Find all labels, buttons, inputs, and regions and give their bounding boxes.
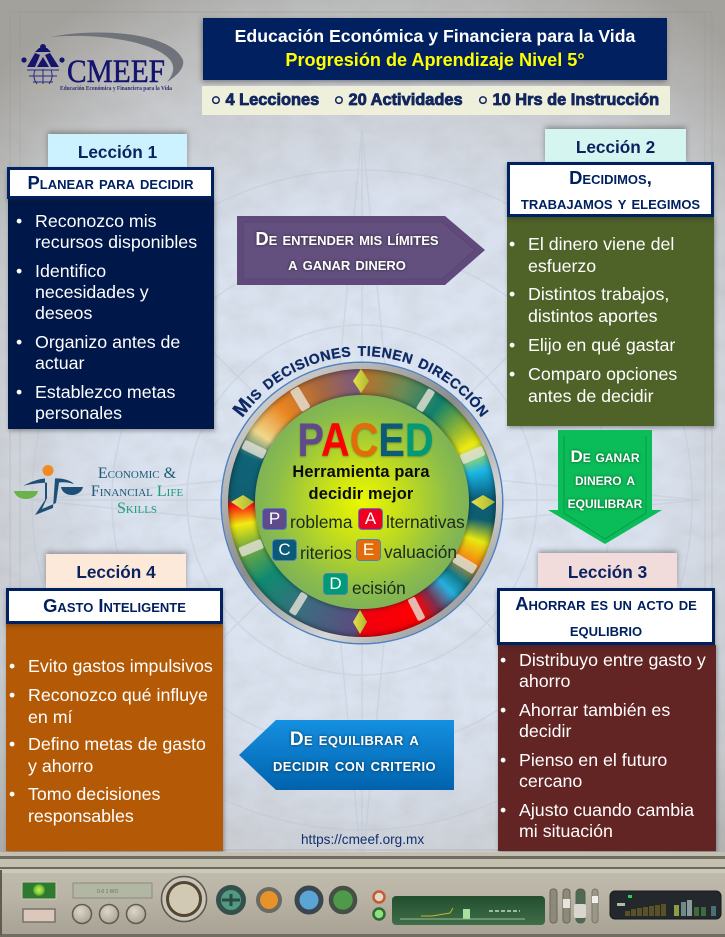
text display and small buttons [72, 883, 152, 924]
lesson 4 bullets: Evito gastos impulsivos [28, 656, 213, 676]
panel: lesson 2 [504, 124, 718, 430]
title banner: Educación Económica y Financiera para la Vida [235, 26, 635, 46]
lesson 2 bullets: Comparo opciones [528, 364, 677, 384]
step badge: Decisión [323, 573, 406, 598]
lesson 2 bullets: antes de decidir [528, 386, 654, 406]
lesson 1 bullets: actuar [35, 353, 84, 373]
step badge: Criterios [272, 539, 352, 563]
wheel colour ring [228, 369, 496, 637]
lesson 1 tab [48, 134, 187, 168]
wheel centre disc [255, 395, 469, 609]
green chart display [392, 896, 545, 925]
lesson 4 bullets [6, 623, 223, 851]
lesson 3 heading: equlibrio [570, 619, 642, 640]
arrow: lesson 2 to lesson 3: De ganar [570, 447, 640, 466]
sliders [550, 889, 598, 923]
lesson 4 bullets: responsables [28, 806, 134, 826]
step badge: Evaluación: E [363, 540, 374, 559]
title banner: Progresión de Aprendizaje Nivel 5° [285, 50, 585, 70]
lesson 3 tab [538, 553, 677, 589]
lesson 3 heading [497, 588, 715, 645]
lesson 4 bullets: Reconozco qué influye [28, 685, 208, 705]
summary bar: lessons, activities, hours: ○ 4 Lecciones [211, 91, 319, 109]
control panel strip [0, 852, 725, 937]
panel: lesson 1 [4, 129, 218, 434]
lesson 1 bullets: deseos [35, 303, 92, 323]
step badge: Alternativas [358, 508, 465, 532]
lesson 3 bullets: decidir [519, 721, 571, 741]
lesson 3 bullets: cercano [519, 771, 582, 791]
indicator light [22, 882, 56, 922]
text display and small buttons: 0-0 1 WO [97, 889, 119, 895]
logo: Economic & Financial Life Skills: Economic & [98, 465, 176, 482]
lesson 1 tab: Lección 1 [78, 142, 157, 162]
wheel ticks, diamonds and arc caption [231, 346, 495, 634]
logo: CMEEF: Educación Económica y Financiera para la Vida [60, 85, 172, 92]
lesson 2 bullets: Elijo en qué gastar [528, 335, 675, 355]
tool caption: Herramienta para [292, 463, 430, 481]
lesson 2 heading: trabajamos y elegimos [521, 192, 700, 213]
panel: lesson 3 [494, 548, 720, 852]
lesson 1 bullets [8, 198, 214, 429]
logo: CMEEF: CMEEF [67, 54, 165, 90]
logo: CMEEF [21, 32, 184, 92]
lesson 1 bullets: Establezco metas [35, 382, 175, 402]
lesson 2 bullets: El dinero viene del [528, 234, 674, 254]
lesson 1 bullets: recursos disponibles [35, 232, 197, 252]
lesson 4 bullets: en mí [28, 706, 72, 726]
website link: https://cmeef.org.mx [301, 832, 424, 847]
arrow: lesson 3 to lesson 4 [239, 720, 454, 790]
arrow: lesson 3 to lesson 4: decidir con criterio [273, 755, 436, 776]
arrow: lesson 2 to lesson 3: equilibrar [568, 493, 642, 512]
lesson 4 tab: Lección 4 [76, 562, 156, 582]
lesson 1 bullets: necesidades y [35, 282, 149, 302]
round coloured buttons [218, 888, 355, 912]
lesson 2 bullets: esfuerzo [528, 256, 596, 276]
lesson 3 bullets: Distribuyo entre gasto y [519, 650, 706, 670]
lesson 3 bullets [498, 645, 716, 851]
step badge: Alternativas: A [365, 509, 376, 528]
arrow: lesson 3 to lesson 4: De equilibrar a [290, 729, 419, 750]
summary bar: lessons, activities, hours [202, 86, 670, 115]
PACED wordmark: PACED [297, 413, 434, 466]
step badge: Evaluación [356, 539, 457, 562]
panel: lesson 4 [4, 548, 226, 852]
tool caption: decidir mejor [309, 485, 413, 503]
lesson 3 heading: Ahorrar es un acto de [515, 593, 697, 614]
step badge: Criterios: C [278, 540, 291, 559]
lesson 3 bullets: ahorro [519, 671, 570, 691]
step badge: Alternativas: lternativas [386, 512, 465, 532]
wheel ticks, diamonds and arc caption: Mis decisiones tienen dirección [232, 346, 489, 418]
step badge: Decisión: ecisión [352, 578, 406, 598]
lesson 4 heading: Gasto Inteligente [43, 595, 186, 616]
arrow: lesson 2 to lesson 3: dinero a [575, 470, 635, 489]
summary bar: lessons, activities, hours: ○ 20 Actividades [334, 91, 463, 109]
arrow: lesson 1 to lesson 2: a ganar dinero [288, 253, 406, 274]
lesson 2 bullets: distintos aportes [528, 306, 657, 326]
tool caption [292, 463, 430, 503]
lesson 4 bullets: Defino metas de gasto [28, 734, 206, 754]
lesson 3 bullets: Pienso en el futuro [519, 750, 667, 770]
lesson 2 bullets [507, 217, 714, 426]
logo: Economic & Financial Life Skills: Skills [117, 500, 157, 517]
step badge: Problema: P [269, 509, 280, 528]
lesson 3 bullets: Ahorrar también es [519, 700, 670, 720]
lesson 1 heading: Planear para decidir [28, 172, 193, 193]
step badge: Criterios: riterios [300, 543, 352, 563]
summary bar: lessons, activities, hours: ○ 10 Hrs de Instrucción [478, 91, 659, 109]
lesson 3 bullets: Ajusto cuando cambia [519, 800, 694, 820]
title banner [203, 18, 667, 80]
lesson 2 bullets: Distintos trabajos, [528, 284, 669, 304]
arrow: lesson 2 to lesson 3 [548, 430, 662, 544]
lesson 3 tab: Lección 3 [568, 562, 647, 582]
step badge: Decisión: D [329, 574, 342, 593]
lesson 1 bullets: Organizo antes de [35, 332, 180, 352]
lesson 3 bullets: mi situación [519, 821, 613, 841]
dial [162, 876, 206, 922]
lesson 1 bullets: personales [35, 403, 122, 423]
arrow: lesson 1 to lesson 2: De entender mis límites [255, 228, 439, 249]
lesson 1 bullets: Reconozco mis [35, 211, 157, 231]
arrow: lesson 1 to lesson 2 [237, 216, 485, 285]
step badge: Problema [262, 508, 352, 532]
lesson 2 heading [507, 162, 714, 217]
lesson 2 tab [545, 129, 686, 163]
wheel metal rim [222, 363, 502, 643]
lesson 4 bullets: Tomo decisiones [28, 784, 160, 804]
lesson 4 bullets: y ahorro [28, 756, 93, 776]
logo: Economic & Financial Life Skills: Financial Life [91, 482, 183, 500]
lesson 4 heading [6, 588, 223, 624]
lesson 2 tab: Lección 2 [576, 136, 655, 156]
logo: Economic & Financial Life Skills [14, 465, 183, 517]
lesson 2 heading: Decidimos, [569, 167, 652, 188]
lesson 4 tab [46, 554, 186, 589]
step badge: Evaluación: valuación [384, 542, 457, 562]
central wheel: PACED [220, 346, 504, 644]
lesson 1 heading [7, 167, 214, 199]
step badge: Problema: roblema [290, 512, 352, 532]
lesson 1 bullets: Identifico [35, 261, 106, 281]
status lights [374, 892, 384, 920]
level meter [610, 891, 721, 919]
